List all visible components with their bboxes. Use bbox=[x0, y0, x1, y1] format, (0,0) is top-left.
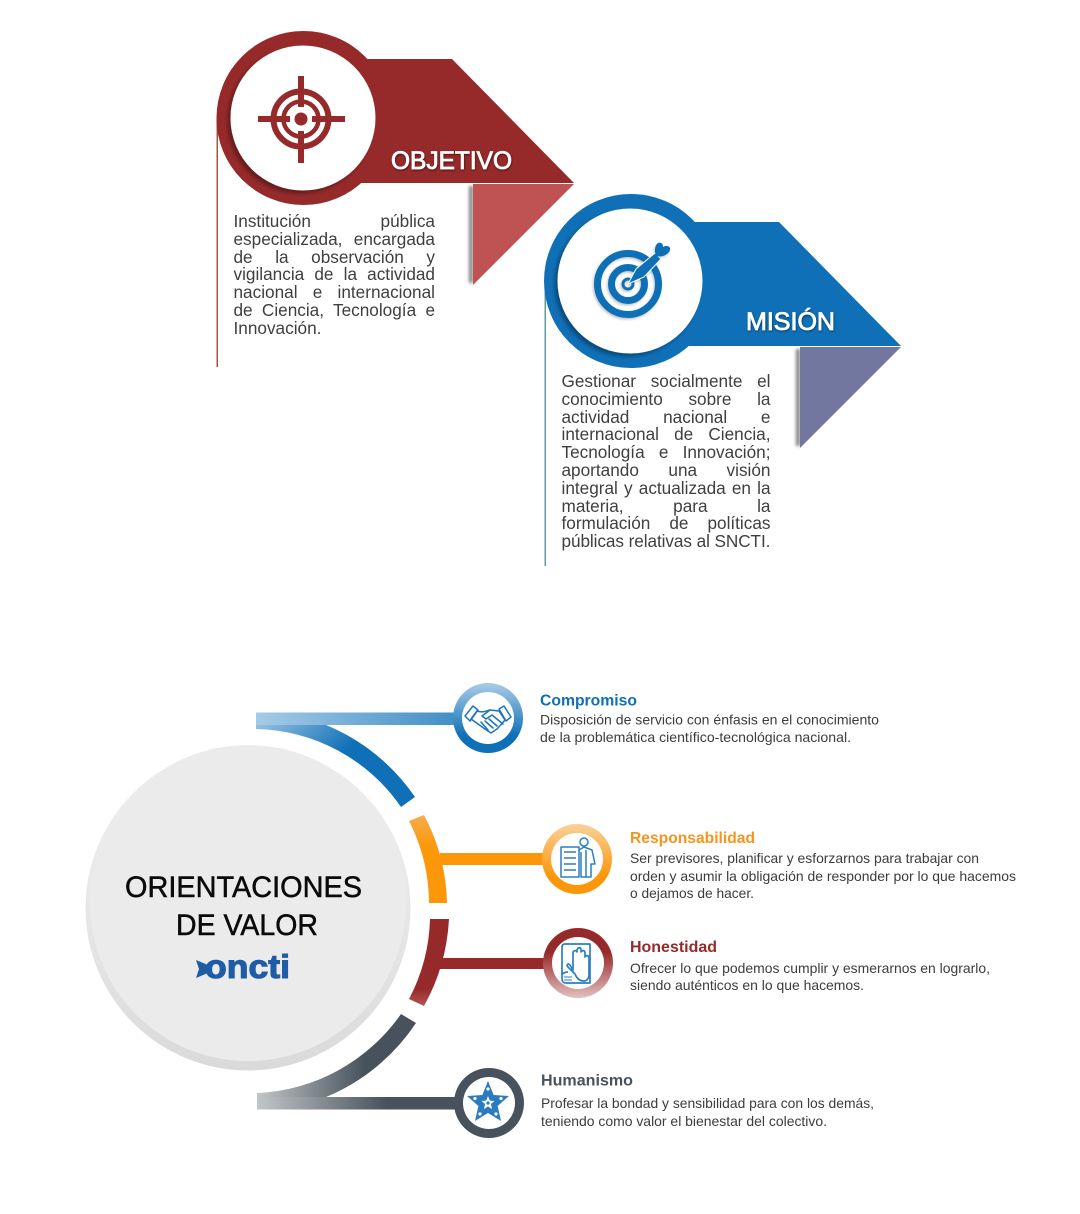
text: compromiso: Disposición de servicio con énfasis en el conocimiento bbox=[540, 712, 879, 728]
icon: hand on book bbox=[562, 944, 590, 983]
text block: mision: formulación de políticas bbox=[562, 513, 770, 533]
text: honestidad bbox=[630, 960, 990, 993]
ring: mision bbox=[544, 194, 718, 368]
text block: mision: internacional de Ciencia, bbox=[562, 424, 770, 444]
text block: objetivo: de Ciencia, Tecnología e bbox=[234, 300, 435, 320]
text block: mision: públicas relativas al SNCTI. bbox=[562, 531, 770, 551]
item: humanismo bbox=[257, 1014, 874, 1138]
text: humanismo: teniendo como valor el bienestar del colectivo. bbox=[541, 1113, 827, 1129]
connector bar: responsabilidad bbox=[440, 853, 550, 865]
text block: objetivo: vigilancia de la actividad bbox=[234, 264, 435, 284]
connector arc: responsabilidad bbox=[409, 815, 447, 903]
ring: objetivo bbox=[216, 31, 390, 205]
text block: objetivo: nacional e internacional bbox=[234, 282, 435, 302]
ring: responsabilidad bbox=[542, 824, 612, 894]
connector bar: humanismo bbox=[257, 1097, 462, 1110]
text block: mision: materia, para la bbox=[562, 496, 770, 516]
text block: objetivo bbox=[234, 211, 435, 338]
fold triangle: mision bbox=[800, 347, 901, 448]
item: responsabilidad bbox=[409, 815, 1016, 903]
item: compromiso bbox=[256, 683, 879, 807]
heading: humanismo: Humanismo bbox=[541, 1072, 633, 1090]
white disc: responsabilidad bbox=[551, 833, 603, 885]
title: orientaciones de valor bbox=[125, 871, 362, 942]
white disc: honestidad bbox=[552, 937, 604, 989]
item: honestidad bbox=[409, 919, 990, 1006]
heading: responsabilidad: Responsabilidad bbox=[630, 830, 755, 847]
text block: objetivo: Innovación. bbox=[234, 318, 321, 338]
text block: mision: aportando una visión bbox=[562, 460, 770, 480]
text block: objetivo: especializada, encargada bbox=[234, 229, 435, 249]
title: orientaciones de valor: DE VALOR bbox=[176, 909, 318, 942]
icon: people star bbox=[467, 1081, 509, 1121]
heading: compromiso: Compromiso bbox=[540, 692, 637, 710]
text: responsabilidad bbox=[630, 850, 1016, 901]
heading: mision: MISIÓN bbox=[746, 307, 835, 336]
icon: crosshair target bbox=[258, 76, 345, 163]
ribbon arrow: objetivo bbox=[350, 59, 574, 183]
timeline rule: mision bbox=[544, 281, 546, 566]
panel: mision banner bbox=[544, 194, 901, 566]
icon: handshake bbox=[465, 706, 511, 733]
text block: mision bbox=[562, 371, 771, 551]
text: humanismo bbox=[541, 1095, 874, 1129]
ring: compromiso bbox=[453, 683, 523, 753]
text block: mision: actividad nacional e bbox=[562, 407, 770, 427]
text block: mision: Gestionar socialmente el bbox=[562, 371, 770, 391]
text block: objetivo: de la observación y bbox=[234, 247, 435, 267]
white disc: mision bbox=[558, 208, 702, 354]
ring: honestidad bbox=[543, 928, 613, 998]
text: compromiso: de la problemática científico-tecnológica nacional. bbox=[540, 729, 851, 745]
text block: objetivo: Institución pública bbox=[234, 211, 435, 231]
text: compromiso bbox=[540, 712, 879, 745]
logo: oncti: oncti bbox=[205, 948, 290, 985]
timeline rule: objetivo bbox=[216, 118, 218, 367]
connector arc: humanismo bbox=[257, 1014, 416, 1109]
panel: objetivo banner bbox=[216, 31, 574, 367]
text: honestidad: Ofrecer lo que podemos cumplir y esmerarnos en lograrlo, bbox=[630, 960, 990, 976]
text block: mision: integral y actualizada en la bbox=[562, 478, 770, 498]
central disc bbox=[86, 745, 410, 1070]
text: responsabilidad: o dejamos de hacer. bbox=[630, 885, 754, 901]
connector bar: compromiso bbox=[256, 712, 461, 725]
icon: dart target bbox=[598, 243, 670, 314]
text block: mision: Tecnología e Innovación; bbox=[562, 442, 770, 462]
text: honestidad: siendo auténticos en lo que hacemos. bbox=[630, 977, 864, 993]
white disc: compromiso bbox=[462, 692, 514, 744]
connector arc: honestidad bbox=[409, 919, 449, 1006]
text block: mision: conocimiento sobre la bbox=[562, 389, 770, 409]
connector bar: honestidad bbox=[440, 958, 550, 969]
heading: objetivo: OBJETIVO bbox=[391, 147, 512, 175]
title: orientaciones de valor: ORIENTACIONES bbox=[125, 871, 362, 904]
connector arc: compromiso bbox=[256, 713, 415, 807]
text: responsabilidad: Ser previsores, planificar y esforzarnos para trabajar con bbox=[630, 850, 979, 866]
ring: humanismo bbox=[454, 1068, 524, 1138]
white disc: humanismo bbox=[463, 1077, 515, 1129]
text: responsabilidad: orden y asumir la obligación de responder por lo que hacemos bbox=[630, 868, 1016, 884]
ribbon arrow: mision bbox=[680, 222, 901, 346]
heading: honestidad: Honestidad bbox=[630, 939, 717, 956]
fold triangle: objetivo bbox=[473, 184, 574, 285]
text: humanismo: Profesar la bondad y sensibilidad para con los demás, bbox=[541, 1095, 874, 1111]
icon: clipboard and person bbox=[561, 838, 595, 877]
white disc: objetivo bbox=[230, 46, 376, 190]
